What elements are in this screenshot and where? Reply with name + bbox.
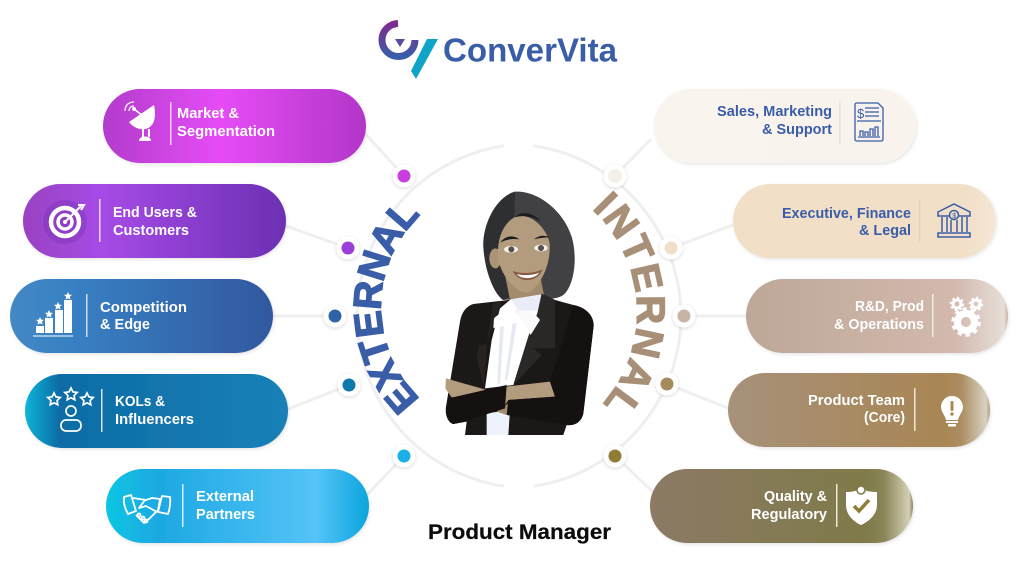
panel: competition and edge: & Edge <box>100 317 150 333</box>
curved heading: internal: INTERNAL <box>592 190 666 409</box>
panel: quality and regulatory: Quality & <box>764 489 828 505</box>
panel: external partners <box>106 469 369 543</box>
panel: market and segmentation <box>103 89 366 163</box>
panel: quality and regulatory: Regulatory <box>751 507 827 523</box>
icon: person with stars <box>48 388 93 431</box>
icon: rising bars with stars <box>33 292 73 336</box>
icon: bank building: $ <box>952 213 956 220</box>
panel: competition and edge: Competition <box>100 300 187 316</box>
panel: sales, marketing and support: Sales, Marketing <box>717 104 832 120</box>
panel: competition and edge <box>10 279 273 353</box>
icon: gears <box>951 298 982 335</box>
panel: product team core <box>728 373 990 447</box>
panel: external partners: Partners <box>196 507 255 523</box>
icon: target <box>51 205 84 236</box>
panel: executive, finance and legal: & Legal <box>859 223 911 239</box>
title: product manager: Product Manager <box>428 521 611 544</box>
curved heading: external: EXTERNAL <box>352 207 420 416</box>
panel: KOLs and influencers: Influencers <box>115 412 194 428</box>
icon: satellite dish <box>125 102 155 141</box>
panel: R&D, production and operations: R&D, Prod <box>855 299 924 315</box>
panel: end users and customers: End Users & <box>113 205 198 221</box>
panel: end users and customers: Customers <box>113 223 189 239</box>
panel: quality and regulatory <box>650 469 913 543</box>
icon: handshake <box>124 495 170 523</box>
panel: executive, finance and legal: Executive, Finance <box>782 206 911 222</box>
icon: financial document <box>855 103 883 141</box>
panel: product team core: Product Team <box>808 393 905 409</box>
panel: R&D, production and operations <box>746 279 1008 353</box>
panel: end users and customers <box>23 184 286 258</box>
panel: sales, marketing and support: & Support <box>762 122 832 138</box>
panel: KOLs and influencers <box>25 374 288 448</box>
panel: R&D, production and operations: & Operations <box>834 317 924 333</box>
logo: ConverVita <box>443 32 618 68</box>
icon: bank building <box>938 204 970 237</box>
panel: sales, marketing and support <box>654 89 916 163</box>
icon: shield with check <box>846 486 877 525</box>
icon: financial document: $ <box>857 106 865 121</box>
icon: light bulb with exclamation <box>941 396 963 426</box>
panel: market and segmentation: Segmentation <box>177 124 275 140</box>
illustration: product manager <box>445 192 594 435</box>
node dots <box>324 164 696 468</box>
panel: product team core: (Core) <box>864 410 905 426</box>
panel: executive, finance and legal <box>733 184 996 258</box>
hub ring and connectors <box>273 128 746 500</box>
panel: market and segmentation: Market & <box>177 106 240 122</box>
logo <box>382 24 618 79</box>
panel: external partners: External <box>196 489 254 505</box>
panel: KOLs and influencers: KOLs & <box>115 394 165 410</box>
